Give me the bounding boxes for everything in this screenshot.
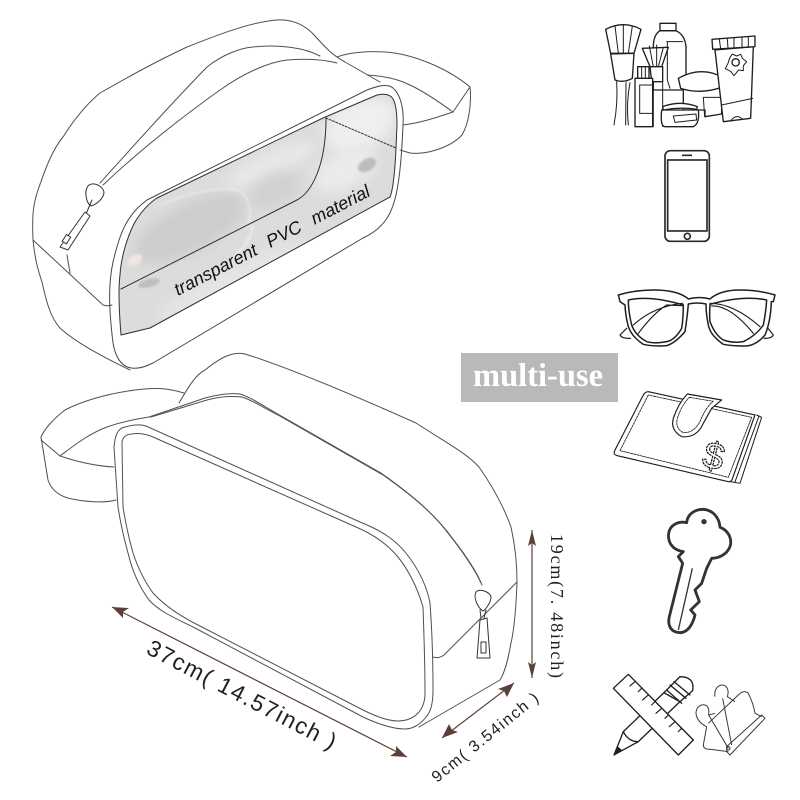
pencil	[614, 677, 693, 755]
front panel bottom	[114, 425, 433, 729]
badge: multi-use	[461, 353, 618, 402]
icon: key	[669, 509, 731, 633]
icon: cosmetics	[606, 23, 755, 127]
dimension text: length: 37cm( 14.57inch )	[143, 634, 341, 754]
dimension text: height: 19cm(7. 48inch)	[546, 534, 567, 678]
strap of bottom bag	[41, 388, 184, 502]
label: transparent PVC material: transparent PVC material	[171, 181, 374, 300]
jar	[678, 72, 725, 117]
dimension text: depth: 9cm( 3.54inch )	[429, 690, 542, 786]
small brush	[642, 45, 668, 127]
strap of top bag	[337, 52, 471, 153]
ruler	[613, 674, 693, 755]
icon: binder clip	[696, 685, 765, 755]
bag: bottom view with dimensions	[41, 353, 567, 786]
front panel seams	[110, 85, 403, 368]
bottle	[653, 23, 686, 90]
bag body outline bottom	[149, 353, 517, 727]
large brush	[606, 25, 641, 125]
icon: glasses	[618, 290, 775, 346]
zipper pull top	[60, 184, 104, 250]
small tube	[635, 67, 653, 127]
bag: top view with transparent window	[33, 20, 471, 370]
badge: multi-use: multi-use	[473, 358, 603, 394]
dimension arrow: height	[528, 530, 536, 678]
icon: phone	[665, 151, 709, 241]
dimension arrow: length	[112, 607, 407, 757]
sunscreen tube	[712, 36, 755, 122]
icon: pencil and ruler	[613, 674, 693, 755]
bag body outline	[33, 20, 380, 370]
dimension arrow: depth	[442, 683, 514, 738]
icon: wallet	[614, 392, 762, 483]
zipper pull bottom	[475, 590, 491, 658]
small pot	[661, 103, 699, 127]
zipper line	[67, 46, 337, 273]
icon: wallet: $	[699, 433, 729, 479]
window with reflections	[120, 94, 396, 334]
